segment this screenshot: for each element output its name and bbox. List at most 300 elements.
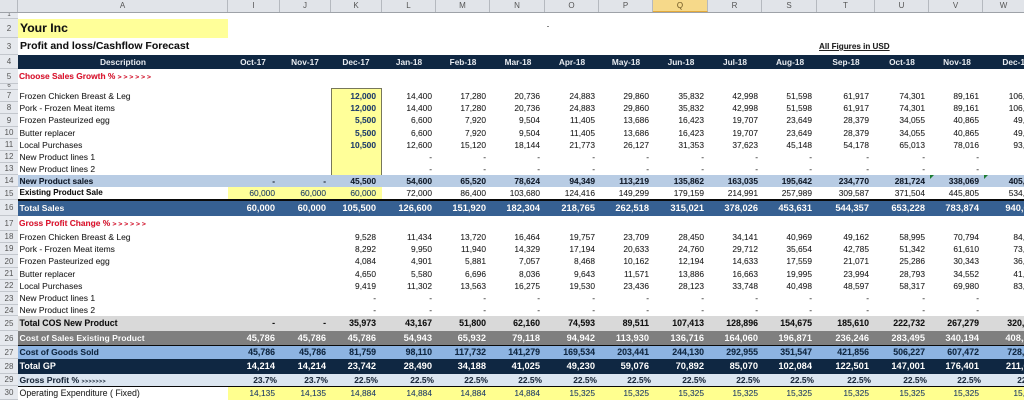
row 8: Pork - Frozen Meat items	[20, 103, 115, 113]
row 28: total gp	[18, 359, 1024, 374]
row 12: -	[537, 152, 540, 162]
row number gutter: 30	[5, 388, 13, 397]
row 21: 28,793	[899, 269, 925, 279]
row 18: 58,995	[899, 232, 925, 242]
row 14: new product sales: -	[323, 176, 326, 186]
row 30: operating expenditure: 14,884	[350, 388, 376, 398]
row 7: 89,161	[953, 91, 979, 101]
row 27: cost of goods sold	[18, 346, 1024, 359]
row 13: -	[701, 164, 704, 174]
row 8: 14,400	[406, 103, 432, 113]
row number gutter: 10	[5, 128, 13, 137]
row 20: 8,468	[574, 256, 595, 266]
row 22: 58,317	[899, 281, 925, 291]
row number gutter: 29	[5, 375, 13, 384]
row 27: cost of goods sold: 98,110	[406, 347, 432, 357]
row 11: 54,178	[843, 140, 869, 150]
row 7: 20,736	[514, 91, 540, 101]
row 23: -	[429, 293, 432, 303]
row 23: -	[483, 293, 486, 303]
row 22: 9,419	[355, 281, 376, 291]
row 26: cost of sales existing product: 94,942	[567, 333, 595, 343]
row number gutter: 9	[7, 116, 11, 125]
row 15: existing product sale: 149,299	[619, 188, 649, 198]
row 15: existing product sale: 309,587	[839, 188, 869, 198]
row 23: -	[592, 293, 595, 303]
row 22: 23,436	[623, 281, 649, 291]
row 9	[20, 115, 1024, 125]
row 10: 40,865	[953, 128, 979, 138]
row 21: 23,994	[843, 269, 869, 279]
row 18: 13,720	[460, 232, 486, 242]
row 27: cost of goods sold: 203,441	[617, 347, 649, 357]
row 11: 31,353	[678, 140, 704, 150]
row 20: 30,343	[953, 256, 979, 266]
row 16: total sales: 126,600	[398, 202, 432, 212]
row 29: gross profit percent: 22.5%	[410, 375, 434, 385]
row 20: 4,901	[411, 256, 432, 266]
row 15: existing product sale: 103,680	[510, 188, 540, 198]
row 30: operating expenditure	[20, 388, 1024, 398]
row number gutter: 16	[5, 203, 13, 212]
row 12: -	[701, 152, 704, 162]
row 12: -	[922, 152, 925, 162]
row 27: cost of goods sold: 607,472	[947, 347, 979, 357]
row 26: cost of sales existing product: 164,060	[724, 333, 758, 343]
row 24: -	[537, 305, 540, 315]
row 8: 61,917	[843, 103, 869, 113]
row 8	[20, 103, 1024, 113]
row 15: existing product sale: 60,000	[300, 188, 326, 198]
row 25: total cos new product	[18, 316, 1024, 331]
row 22: 11,302	[407, 281, 432, 291]
row 11: 37,623	[732, 140, 758, 150]
row 12: New Product lines 1	[20, 152, 95, 162]
row 13: -	[976, 164, 979, 174]
row 25: total cos new product: 185,610	[837, 318, 869, 328]
row 11: 45,148	[786, 140, 812, 150]
sheet title: Profit and loss/Cashflow Forecast	[20, 40, 189, 52]
row 30: operating expenditure: 14,884	[406, 388, 432, 398]
row 10: 23,649	[786, 128, 812, 138]
row 24: -	[755, 305, 758, 315]
row 11: 65,013	[899, 140, 925, 150]
row 18: 9,528	[355, 232, 376, 242]
row 14: new product sales: 113,219	[619, 176, 649, 186]
row 25: total cos new product: 35,973	[349, 318, 376, 328]
row 25: total cos new product: 128,896	[726, 318, 758, 328]
row 30: operating expenditure: 14,884	[460, 388, 486, 398]
row 24: -	[483, 305, 486, 315]
row 13: -	[592, 164, 595, 174]
row number gutter: 2	[7, 24, 11, 33]
row number gutter: 13	[5, 164, 13, 173]
row 19: 61,610	[953, 244, 979, 254]
row 8: 29,860	[623, 103, 649, 113]
row 26: cost of sales existing product	[18, 331, 1024, 345]
row 26: cost of sales existing product: 136,716	[670, 333, 704, 343]
row 23: -	[976, 293, 979, 303]
row 22: 33,748	[732, 281, 758, 291]
row 26: cost of sales existing product: 236,246	[835, 333, 869, 343]
row 13: -	[646, 164, 649, 174]
table header row	[18, 55, 1024, 69]
row 25: total cos new product: 62,160	[513, 318, 540, 328]
input box: December sales	[331, 88, 382, 175]
row 30: operating expenditure: 15,325	[678, 388, 704, 398]
table header row: Oct-18	[889, 57, 915, 67]
row 23: New Product lines 1	[20, 293, 95, 303]
row 30: operating expenditure: 15,325	[569, 388, 595, 398]
row 28: total gp: 14,214	[247, 361, 275, 371]
row 8: 24,883	[569, 103, 595, 113]
row 11: 78,016	[953, 140, 979, 150]
row 10: 13,686	[623, 128, 649, 138]
column header strip: U	[899, 1, 904, 10]
column header strip: L	[406, 1, 411, 10]
row 26: cost of sales existing product: 45,786	[298, 333, 326, 343]
row 23: -	[537, 293, 540, 303]
rule above total sales	[18, 199, 1024, 200]
row 9: 34,055	[899, 115, 925, 125]
row 7: 12,000	[350, 91, 376, 101]
row 20: 4,084	[355, 256, 376, 266]
row 28: total gp: 41,025	[512, 361, 540, 371]
table header row: Sep-18	[832, 57, 860, 67]
row 30: operating expenditure: 15,325	[843, 388, 869, 398]
row 16: total sales	[18, 200, 1024, 216]
row 14: new product sales: 281,724	[895, 176, 925, 186]
column header strip: P	[623, 1, 628, 10]
row 15: existing product sale: 124,416	[565, 188, 595, 198]
row 28: total gp: 176,401	[945, 361, 979, 371]
column header strip: M	[459, 1, 466, 10]
row 19: 20,633	[623, 244, 649, 254]
row 25: total cos new product: 51,800	[459, 318, 486, 328]
row 10: 9,504	[519, 128, 540, 138]
row 14: new product sales: 163,035	[728, 176, 758, 186]
row 14: new product sales: 54,600	[406, 176, 432, 186]
row 18: 16,464	[514, 232, 540, 242]
row 29: gross profit percent: 22.5%	[518, 375, 542, 385]
row 19: 51,342	[899, 244, 925, 254]
row 30: operating expenditure: 15,325	[953, 388, 979, 398]
row number gutter: 7	[7, 91, 11, 100]
column header strip: O	[568, 1, 575, 10]
row number gutter: 20	[5, 257, 13, 266]
row 23: -	[701, 293, 704, 303]
row 20: 14,633	[732, 256, 758, 266]
row 28: total gp: 23,742	[348, 361, 376, 371]
row 30: operating expenditure: 14,884	[514, 388, 540, 398]
row number gutter: 3	[7, 42, 11, 51]
currency note: All Figures in USD	[819, 42, 890, 51]
row 9: 16,423	[678, 115, 704, 125]
row 15: existing product sale: 60,000	[350, 188, 376, 198]
row 9: 5,500	[355, 115, 376, 125]
row 13: -	[809, 164, 812, 174]
row 10	[20, 128, 1024, 138]
row number gutter: 25	[5, 319, 13, 328]
row 25: total cos new product: 74,593	[568, 318, 595, 328]
row 14: new product sales: New Product sales	[20, 176, 93, 186]
row 24: -	[922, 305, 925, 315]
row 27: cost of goods sold: 81,759	[349, 347, 376, 357]
row 10: 16,423	[678, 128, 704, 138]
row 9: 11,405	[570, 115, 595, 125]
row 23: -	[809, 293, 812, 303]
row 27: cost of goods sold: 351,547	[780, 347, 812, 357]
input band: existing sales	[228, 187, 382, 199]
row 8: 35,832	[678, 103, 704, 113]
row 14: new product sales: 195,642	[782, 176, 812, 186]
row 7: 35,832	[678, 91, 704, 101]
row 20: 25,286	[899, 256, 925, 266]
row 28: total gp: 28,490	[404, 361, 432, 371]
row 22: 28,123	[678, 281, 704, 291]
row 20: 17,559	[786, 256, 812, 266]
row 24: -	[646, 305, 649, 315]
row 7: 14,400	[406, 91, 432, 101]
row 9: 9,504	[519, 115, 540, 125]
row 16: total sales: 105,500	[342, 202, 376, 212]
error flag triangles	[930, 175, 988, 179]
rule above operating expenditure	[18, 386, 1024, 387]
column header strip: Q	[677, 1, 683, 10]
row 29: gross profit percent	[18, 374, 1024, 386]
row number gutter: 12	[5, 152, 13, 161]
row 7: 17,280	[460, 91, 486, 101]
row 24: -	[429, 305, 432, 315]
row 10: 7,920	[465, 128, 486, 138]
row 14: new product sales: -	[272, 176, 275, 186]
row 23: -	[866, 293, 869, 303]
row number gutter: 14	[5, 176, 13, 185]
row 19: Pork - Frozen Meat items	[20, 244, 115, 254]
row 22: 19,530	[569, 281, 595, 291]
row 28: total gp: 70,892	[676, 361, 704, 371]
row 27: cost of goods sold: Cost of Goods Sold	[20, 347, 99, 357]
row 7: 24,883	[569, 91, 595, 101]
row 14: new product sales: 234,770	[839, 176, 869, 186]
row 27: cost of goods sold: 141,279	[508, 347, 540, 357]
row number gutter: 15	[5, 189, 13, 198]
row 21	[20, 269, 1024, 279]
column header strip: V	[953, 1, 958, 10]
row number gutter: 5	[7, 72, 11, 81]
row 15: existing product sale: 60,000	[249, 188, 275, 198]
stray mark	[547, 26, 549, 27]
table header row: Dec-17	[342, 57, 370, 67]
row 29: gross profit percent: 22.5%	[790, 375, 814, 385]
row 25: total cos new product: 107,413	[672, 318, 704, 328]
row 16: total sales: 653,228	[891, 202, 925, 212]
row 24: -	[809, 305, 812, 315]
row 18: 40,969	[786, 232, 812, 242]
row 26: cost of sales existing product: 196,871	[778, 333, 812, 343]
row 30: operating expenditure: 14,135	[249, 388, 275, 398]
row number gutter: 18	[5, 232, 13, 241]
column header strip: W	[1000, 1, 1007, 10]
row 21: 19,995	[786, 269, 812, 279]
row 26: cost of sales existing product: 283,495	[891, 333, 925, 343]
row 16: total sales: 60,000	[247, 202, 275, 212]
row 12: -	[809, 152, 812, 162]
row 25: total cos new product: -	[272, 318, 275, 328]
row 16: total sales: 218,765	[561, 202, 595, 212]
row 22	[20, 281, 1024, 291]
row 28: total gp: 49,230	[567, 361, 595, 371]
table header row: Apr-18	[559, 57, 585, 67]
row 23: -	[755, 293, 758, 303]
row 12: -	[755, 152, 758, 162]
row 19: 8,292	[355, 244, 376, 254]
row 28: total gp: Total GP	[20, 361, 56, 371]
column header strip	[0, 0, 1024, 13]
row 11: 10,500	[350, 140, 376, 150]
row 22: 48,597	[843, 281, 869, 291]
row 13: New Product lines 2	[20, 164, 95, 174]
row 22: 40,498	[786, 281, 812, 291]
row 25: total cos new product: 267,279	[947, 318, 979, 328]
row 28: total gp: 14,214	[298, 361, 326, 371]
row 27: cost of goods sold: 45,786	[299, 347, 326, 357]
row 19: 42,785	[843, 244, 869, 254]
row 13: -	[922, 164, 925, 174]
row 15: existing product sale: 257,989	[782, 188, 812, 198]
row 21: 13,886	[678, 269, 704, 279]
row 7: 51,598	[786, 91, 812, 101]
row number gutter	[0, 13, 18, 400]
table header row: Jun-18	[668, 57, 694, 67]
row 16: total sales: Total Sales	[20, 202, 64, 212]
row 23: -	[922, 293, 925, 303]
row 19: 24,760	[678, 244, 704, 254]
row 14: new product sales	[18, 175, 1024, 187]
row 29: gross profit percent: 22.5%	[627, 375, 651, 385]
row 7: 61,917	[843, 91, 869, 101]
row 18: 19,757	[569, 232, 595, 242]
row 30: operating expenditure: 15,325	[786, 388, 812, 398]
row 12: -	[483, 152, 486, 162]
table header row: May-18	[612, 57, 640, 67]
row 19: 29,712	[732, 244, 758, 254]
row 21: 8,036	[519, 269, 540, 279]
row 11: 12,600	[406, 140, 432, 150]
section heading: gross profit change: Gross Profit Change % > > > > > >	[19, 218, 146, 228]
row 26: cost of sales existing product: 54,943	[404, 333, 432, 343]
row 24: -	[701, 305, 704, 315]
row 26: cost of sales existing product: 45,786	[348, 333, 376, 343]
row 28: total gp: 102,084	[778, 361, 812, 371]
table header row: Jan-18	[396, 57, 422, 67]
row 30: operating expenditure: 15,325	[623, 388, 649, 398]
row 10: 11,405	[570, 128, 595, 138]
row 18: 23,709	[623, 232, 649, 242]
row number gutter: 17	[5, 219, 13, 228]
row 10: 19,707	[732, 128, 758, 138]
row 29: gross profit percent: 22.5%	[354, 375, 378, 385]
row 29: gross profit percent: Gross Profit % > > > > > > >	[20, 375, 106, 385]
row 30: operating expenditure: 15,325	[732, 388, 758, 398]
row 20: 5,881	[465, 256, 486, 266]
row 12: -	[976, 152, 979, 162]
row 26: cost of sales existing product: 113,930	[616, 333, 649, 343]
row 24	[20, 305, 979, 315]
row 13: -	[866, 164, 869, 174]
row number gutter: 23	[5, 294, 13, 303]
row 26: cost of sales existing product: 65,932	[458, 333, 486, 343]
table header row: Aug-18	[776, 57, 804, 67]
row 24: -	[592, 305, 595, 315]
row 11: 18,144	[514, 140, 540, 150]
row 25: total cos new product: -	[323, 318, 326, 328]
row 24: -	[976, 305, 979, 315]
row 14: new product sales: 135,862	[674, 176, 704, 186]
row 29: gross profit percent: 22.5%	[682, 375, 706, 385]
row 13: -	[429, 164, 432, 174]
row 19	[20, 244, 1024, 254]
row 10: 5,500	[355, 128, 376, 138]
row 15: existing product sale: Existing Product Sale	[20, 188, 103, 197]
row 7: Frozen Chicken Breast & Leg	[20, 91, 131, 101]
row 16: total sales: 315,021	[670, 202, 704, 212]
column header strip: A	[120, 1, 125, 10]
row 21: 16,663	[732, 269, 758, 279]
row 16: total sales: 783,874	[945, 202, 979, 212]
row 28: total gp: 122,501	[835, 361, 869, 371]
column header strip: K	[353, 1, 359, 10]
row 13: -	[537, 164, 540, 174]
row 26: cost of sales existing product: Cost of Sales Existing Product	[20, 333, 145, 343]
row 21: 11,571	[624, 269, 649, 279]
row 15: existing product sale: 214,991	[728, 188, 758, 198]
row 29: gross profit percent: 22.5%	[573, 375, 597, 385]
row 21: 6,696	[465, 269, 486, 279]
row 13: -	[483, 164, 486, 174]
row 14: new product sales: 94,349	[569, 176, 595, 186]
row 13	[20, 164, 979, 174]
row 13: -	[755, 164, 758, 174]
column header strip: T	[843, 1, 848, 10]
row 21: 9,643	[574, 269, 595, 279]
row 16: total sales: 544,357	[835, 202, 869, 212]
row 21: 5,580	[411, 269, 432, 279]
row 8: 51,598	[786, 103, 812, 113]
row 8: 12,000	[350, 103, 376, 113]
row 11: 26,127	[623, 140, 649, 150]
row 18: 11,434	[407, 232, 432, 242]
row 27: cost of goods sold: 244,130	[672, 347, 704, 357]
row 10: Butter replacer	[20, 128, 75, 138]
row 23: -	[646, 293, 649, 303]
column header strip: S	[786, 1, 792, 10]
row 29: gross profit percent: 23.7%	[304, 375, 328, 385]
row 26: cost of sales existing product: 340,194	[945, 333, 979, 343]
row number gutter: 26	[5, 334, 13, 343]
row 18: 49,162	[843, 232, 869, 242]
row 10: 6,600	[411, 128, 432, 138]
row 15: existing product sale	[20, 188, 1024, 198]
column header strip: I	[252, 1, 255, 10]
row 8: 74,301	[899, 103, 925, 113]
row 21: 4,650	[355, 269, 376, 279]
row 20	[20, 256, 1024, 266]
row 15: existing product sale: 72,000	[406, 188, 432, 198]
row 30: operating expenditure: 15,325	[899, 388, 925, 398]
row number gutter: 21	[5, 269, 13, 278]
row 16: total sales: 453,631	[778, 202, 812, 212]
